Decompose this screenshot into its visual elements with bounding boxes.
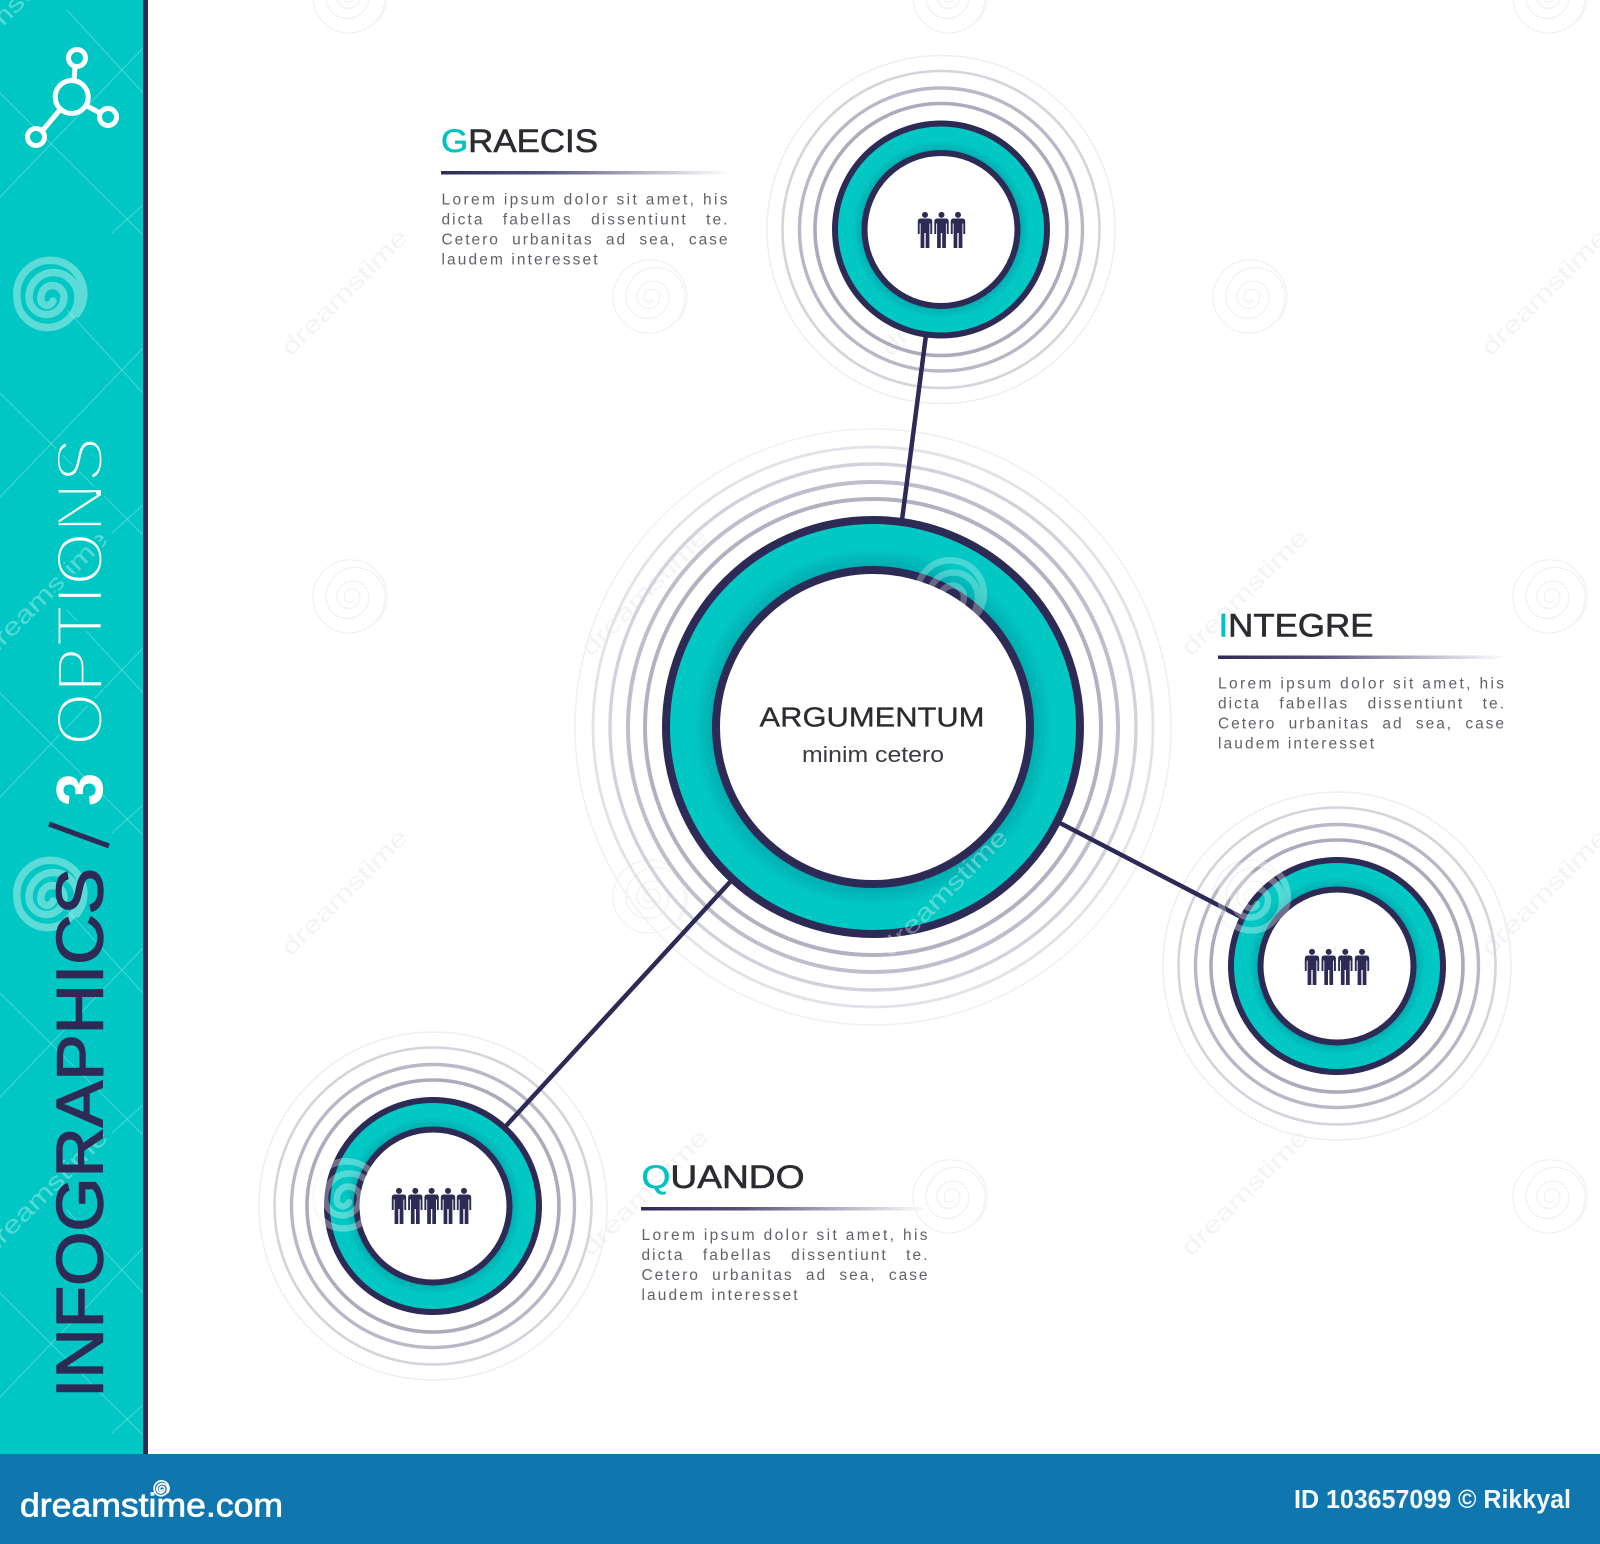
option node: Quando: [327, 1100, 539, 1312]
faint watermark on white background: dreamstime: [1476, 224, 1600, 362]
body copy: laudem interesset: [642, 1287, 798, 1304]
white disc: [864, 153, 1018, 306]
watermark over graphics: [313, 560, 1288, 1228]
faint watermark on white background: dreamstime: [1176, 524, 1314, 662]
white disc: [1260, 890, 1414, 1042]
teal ring: [835, 124, 1047, 336]
halo rings: Integre: [1163, 792, 1511, 1140]
central title: ARGUMENTUM: [760, 702, 984, 732]
heading rule: [641, 1207, 929, 1210]
sidebar title: OPTIONS: OPTIONS: [42, 437, 116, 746]
halo rings: Quando: [259, 1032, 607, 1380]
white disc: [356, 1130, 510, 1282]
body copy: [442, 192, 728, 268]
halo rings: Graecis: [767, 56, 1115, 404]
body copy: dicta fabellas dissentiunt te.: [642, 1247, 928, 1264]
sidebar slash: [49, 824, 109, 846]
footer logo text: dreamstime.com: [20, 1486, 283, 1524]
watermark over graphics: dreamstime: [876, 824, 1014, 962]
icon: three people: [918, 212, 965, 248]
icon: four people: [1305, 949, 1369, 985]
faint watermark on white background: dreamstime: [1476, 824, 1600, 962]
footer credit: ID 103657099 © Rikkyal: [1294, 1486, 1571, 1514]
central white disc: [716, 570, 1030, 884]
text block: Integre: [1218, 608, 1506, 752]
text block: Graecis: [441, 123, 729, 268]
sidebar number 3: 3: [42, 773, 116, 806]
central teal ring: [666, 520, 1080, 934]
body copy: Cetero urbanitas ad sea, case: [642, 1267, 928, 1284]
heading: GRAECIS: [441, 123, 598, 159]
body copy: dicta fabellas dissentiunt te.: [1218, 696, 1504, 712]
sidebar title: INFOGRAPHICS: INFOGRAPHICS: [42, 868, 116, 1398]
footer logo spiral: [154, 1481, 169, 1496]
body copy: dicta fabellas dissentiunt te.: [442, 212, 728, 228]
faint watermark on white background: dreamstime: [876, 224, 1014, 362]
body copy: laudem interesset: [1218, 736, 1375, 752]
heading rule: [1218, 656, 1506, 659]
panel: left sidebar: [0, 0, 148, 1454]
option node: Integre: [1231, 860, 1443, 1072]
faint watermark on white background: dreamstime: [276, 824, 414, 962]
sidebar watermark: [0, 0, 143, 1435]
body copy: Cetero urbanitas ad sea, case: [442, 232, 728, 248]
text block: Quando: [641, 1159, 929, 1304]
body copy: laudem interesset: [442, 252, 598, 268]
body copy: [642, 1227, 928, 1304]
icon: five people: [392, 1188, 471, 1224]
body copy: Lorem ipsum dolor sit amet, his: [442, 192, 728, 208]
central subtitle: minim cetero: [802, 742, 944, 767]
central halo rings: [575, 429, 1171, 1025]
faint watermark on white background: dreamstime: [276, 224, 414, 362]
heading: QUANDO: [642, 1159, 804, 1195]
heading rule: [441, 171, 729, 174]
teal ring: [327, 1100, 539, 1312]
faint watermark on white background: [276, 0, 1600, 1262]
connector lines: [505, 335, 1243, 1127]
faint watermark on white background: dreamstime: [576, 1124, 714, 1262]
body copy: Lorem ipsum dolor sit amet, his: [642, 1227, 928, 1244]
teal ring: [1231, 860, 1443, 1072]
icon: hub with three nodes: [28, 50, 116, 146]
body copy: [1218, 676, 1504, 752]
body copy: Lorem ipsum dolor sit amet, his: [1218, 676, 1504, 692]
heading: INTEGRE: [1218, 608, 1374, 644]
body copy: Cetero urbanitas ad sea, case: [1218, 716, 1504, 732]
footer bar: [0, 1454, 1600, 1544]
option node: Graecis: [835, 124, 1047, 336]
faint watermark on white background: dreamstime: [1176, 1124, 1314, 1262]
central node: [666, 520, 1080, 934]
faint watermark on white background: dreamstime: [576, 524, 714, 662]
